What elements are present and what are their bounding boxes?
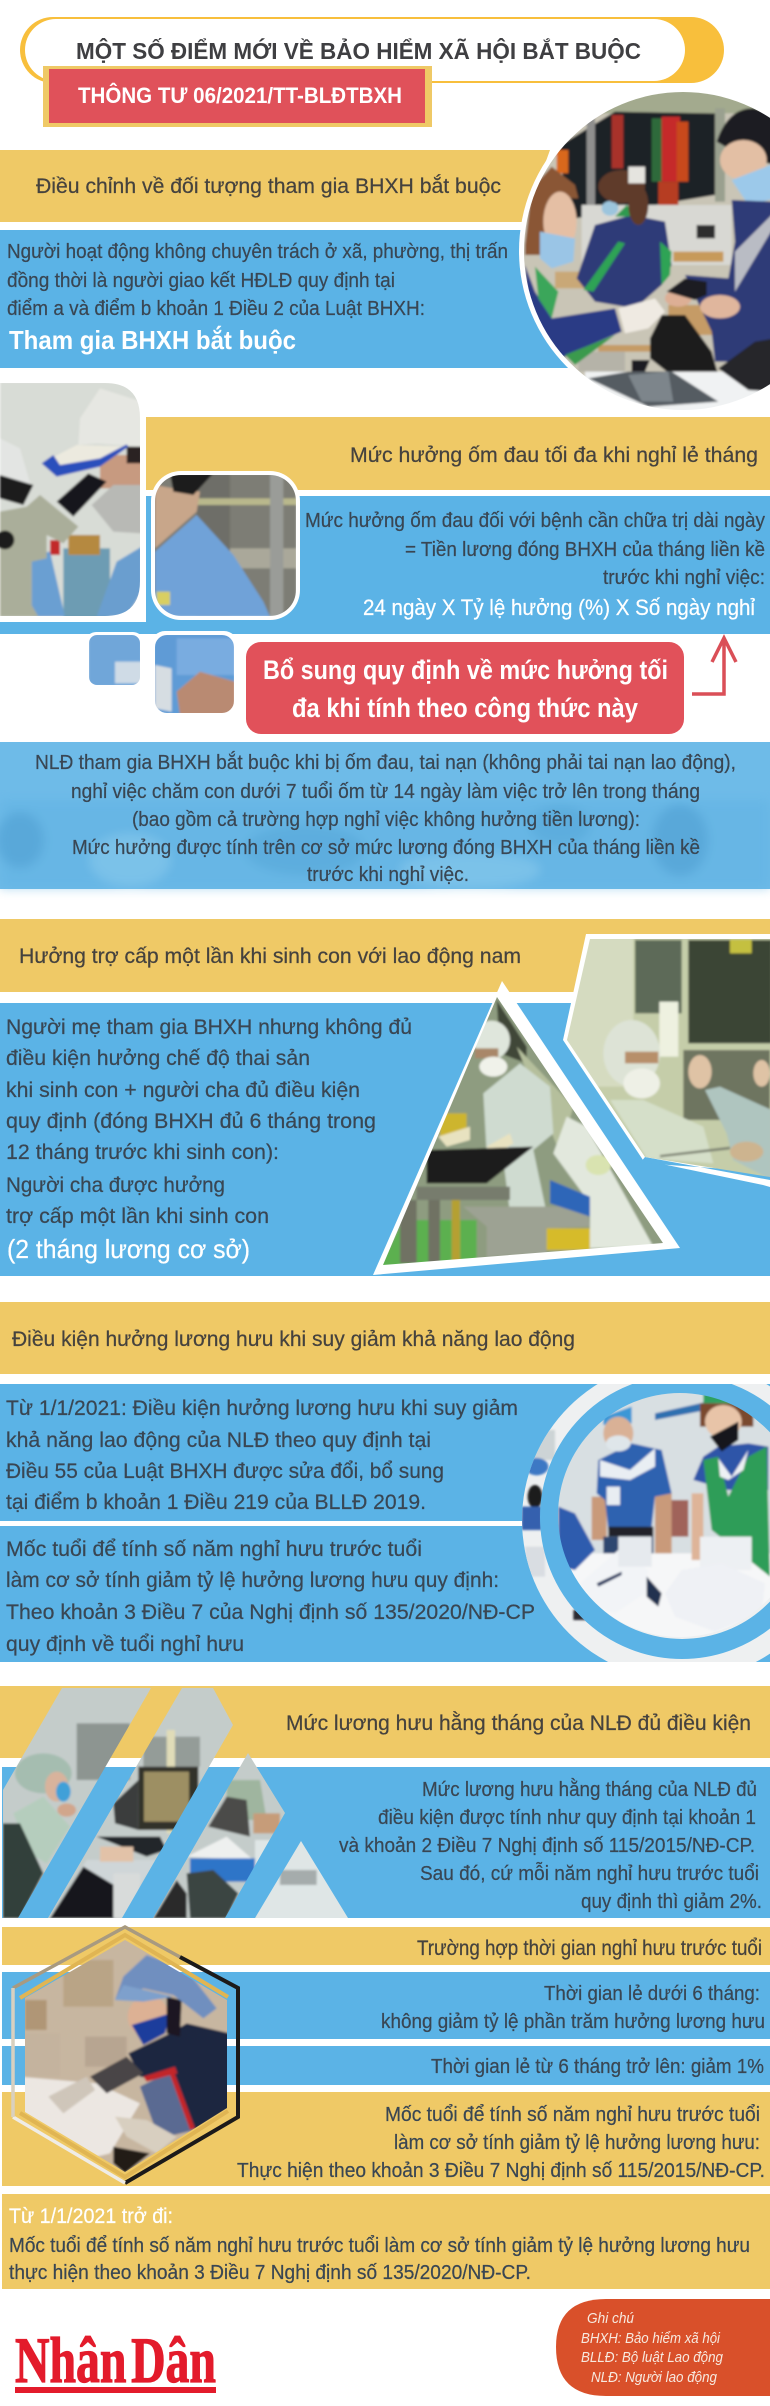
text: thực hiện theo khoản 3 Điều 7 Nghị định số 135/2020/NĐ-CP. bbox=[9, 2261, 531, 2284]
highlight: Tham gia BHXH bắt buộc bbox=[9, 325, 296, 355]
panel: mức lương hưu hằng tháng bbox=[0, 1686, 770, 1918]
body text: nghỉ việc chăm con dưới 7 tuổi ốm từ 14 ngày làm việc trở lên trong tháng bbox=[71, 780, 700, 803]
heading: Mức hưởng ốm đau tối đa khi nghỉ lẻ tháng bbox=[350, 443, 758, 467]
body band bbox=[0, 230, 590, 368]
photo fragment: badge bbox=[89, 632, 140, 685]
body text: Người cha được hưởng bbox=[6, 1173, 225, 1197]
body text: 12 tháng trước khi sinh con): bbox=[6, 1140, 279, 1164]
subheading: Từ 1/1/2021 trở đi: bbox=[9, 2205, 173, 2228]
body band lower bbox=[0, 1526, 770, 1662]
formula text bbox=[305, 509, 766, 589]
heading band bbox=[0, 919, 770, 992]
body text: Người mẹ tham gia BHXH nhưng không đủ bbox=[6, 1015, 412, 1039]
body text: NLĐ tham gia BHXH bắt buộc khi bị ốm đau, tai nạn (không phải tai nạn lao động), bbox=[35, 751, 736, 774]
subtitle red box bbox=[43, 66, 432, 127]
note box: BLLĐ: Bộ luật Lao động bbox=[581, 2349, 724, 2366]
body text: quy định (đóng BHXH đủ 6 tháng trong bbox=[6, 1109, 376, 1133]
heading: Mức lương hưu hằng tháng của NLĐ đủ điều kiện bbox=[286, 1710, 751, 1735]
heading band bbox=[0, 1302, 770, 1374]
panel: trợ cấp một lần bbox=[0, 919, 770, 1276]
panel: mức hưởng ốm đau bbox=[0, 417, 770, 634]
band: dưới 6 tháng bbox=[2, 1972, 770, 2039]
heading band bbox=[146, 417, 770, 490]
text bbox=[9, 2234, 750, 2284]
callout: bổ sung quy định: Bổ sung quy định về mức hưởng tối bbox=[263, 655, 668, 685]
body text bbox=[7, 240, 508, 320]
band: mốc tuổi bbox=[2, 2092, 770, 2186]
callout: bổ sung quy định: đa khi tính theo công thức này bbox=[292, 693, 638, 723]
title: MỘT SỐ ĐIỂM MỚI VỀ BẢO HIỂM XÃ HỘI BẮT BUỘC bbox=[76, 36, 641, 64]
body band upper bbox=[0, 1384, 770, 1521]
body text: Người hoạt động không chuyên trách ở xã, phường, thị trấn bbox=[7, 240, 508, 263]
upper text: tại điểm b khoản 1 Điều 219 của BLLĐ 2019. bbox=[6, 1490, 426, 1514]
lower text: quy định về tuổi nghỉ hưu bbox=[6, 1632, 244, 1656]
upper text: khả năng lao động của NLĐ theo quy định tại bbox=[6, 1428, 431, 1452]
callout: bổ sung quy định bbox=[246, 642, 684, 734]
highlight: (2 tháng lương cơ sở) bbox=[7, 1234, 250, 1264]
note box: Ghi chú bbox=[587, 2310, 635, 2327]
body text: đồng thời là người giao kết HĐLĐ quy định tại bbox=[7, 269, 395, 292]
photo: hexagon worker bbox=[13, 1927, 238, 2183]
upper text: Điều 55 của Luật BHXH được sửa đổi, bổ sung bbox=[6, 1459, 444, 1483]
upper text bbox=[6, 1396, 518, 1514]
photo: microscope worker bbox=[0, 379, 145, 621]
body text: điều kiện hưởng chế độ thai sản bbox=[6, 1046, 310, 1070]
note box: NLĐ: Người lao động bbox=[591, 2369, 718, 2386]
body text: (bao gồm cả trường hợp nghỉ việc không hưởng tiền lương): bbox=[132, 808, 640, 831]
panel: đối tượng tham gia bbox=[0, 150, 590, 368]
tinted background photo bbox=[0, 800, 770, 889]
photo: cleanroom triangle bbox=[373, 981, 680, 1275]
panel: từ 1/1/2021 trở đi bbox=[2, 2194, 770, 2289]
body text: khi sinh con + người cha đủ điều kiện bbox=[6, 1078, 360, 1102]
panel: trường hợp nghỉ hưu trước tuổi bbox=[2, 1927, 770, 2186]
heading: Điều chỉnh về đối tượng tham gia BHXH bắt buộc bbox=[36, 173, 501, 198]
body band bbox=[2, 1767, 770, 1918]
body text: trợ cấp một lần khi sinh con bbox=[6, 1204, 269, 1228]
subtitle red box: THÔNG TƯ 06/2021/TT-BLĐTBXH bbox=[78, 83, 402, 108]
body text: điểm a và điểm b khoản 1 Điều 2 của Luật BHXH: bbox=[7, 297, 425, 320]
heading: Điều kiện hưởng lương hưu khi suy giảm khả năng lao động bbox=[12, 1327, 575, 1351]
lower text: Mốc tuổi để tính số năm nghỉ hưu trước tuổi bbox=[6, 1537, 422, 1561]
upper text: Từ 1/1/2021: Điều kiện hưởng lương hưu khi suy giảm bbox=[6, 1396, 518, 1420]
title pill bbox=[20, 17, 724, 83]
photo fragment: sleeve bbox=[155, 631, 234, 713]
lower text: Theo khoản 3 Điều 7 của Nghị định số 135/2020/NĐ-CP bbox=[6, 1600, 535, 1624]
body text bbox=[35, 751, 736, 886]
photo: circular garment workers bbox=[515, 85, 770, 418]
photo: office strips bbox=[0, 1687, 353, 1920]
body text: trước khi nghỉ việc. bbox=[307, 863, 469, 886]
band: từ 6 tháng bbox=[2, 2046, 770, 2085]
note box: BHXH: Bảo hiểm xã hội bbox=[581, 2330, 721, 2347]
body text bbox=[339, 1778, 762, 1913]
lower text: làm cơ sở tính giảm tỷ lệ hưởng lương hưu quy định: bbox=[6, 1568, 499, 1592]
photo: worker from behind bbox=[151, 471, 300, 620]
body text bbox=[6, 1015, 412, 1228]
panel: điều kiện ốm đau bbox=[0, 742, 770, 889]
panel: điều kiện lương hưu bbox=[0, 1302, 770, 1662]
lower text bbox=[6, 1537, 535, 1656]
body band bbox=[0, 1003, 770, 1276]
logo: Nhân Dân: Nhân Dân bbox=[15, 2325, 216, 2397]
body text: Mức hưởng được tính trên cơ sở mức lương đóng BHXH của tháng liền kề bbox=[72, 836, 700, 859]
heading band bbox=[2, 1927, 770, 1965]
heading band bbox=[0, 150, 550, 222]
heading band bbox=[0, 1686, 770, 1758]
arrow: callout to formula bbox=[692, 638, 736, 694]
photo: circular factory inspection bbox=[515, 1380, 770, 1670]
photo: cleanroom right bbox=[560, 933, 770, 1187]
heading: Hưởng trợ cấp một lần khi sinh con với lao động nam bbox=[19, 944, 521, 968]
note box bbox=[556, 2299, 770, 2396]
body band bbox=[0, 496, 770, 634]
